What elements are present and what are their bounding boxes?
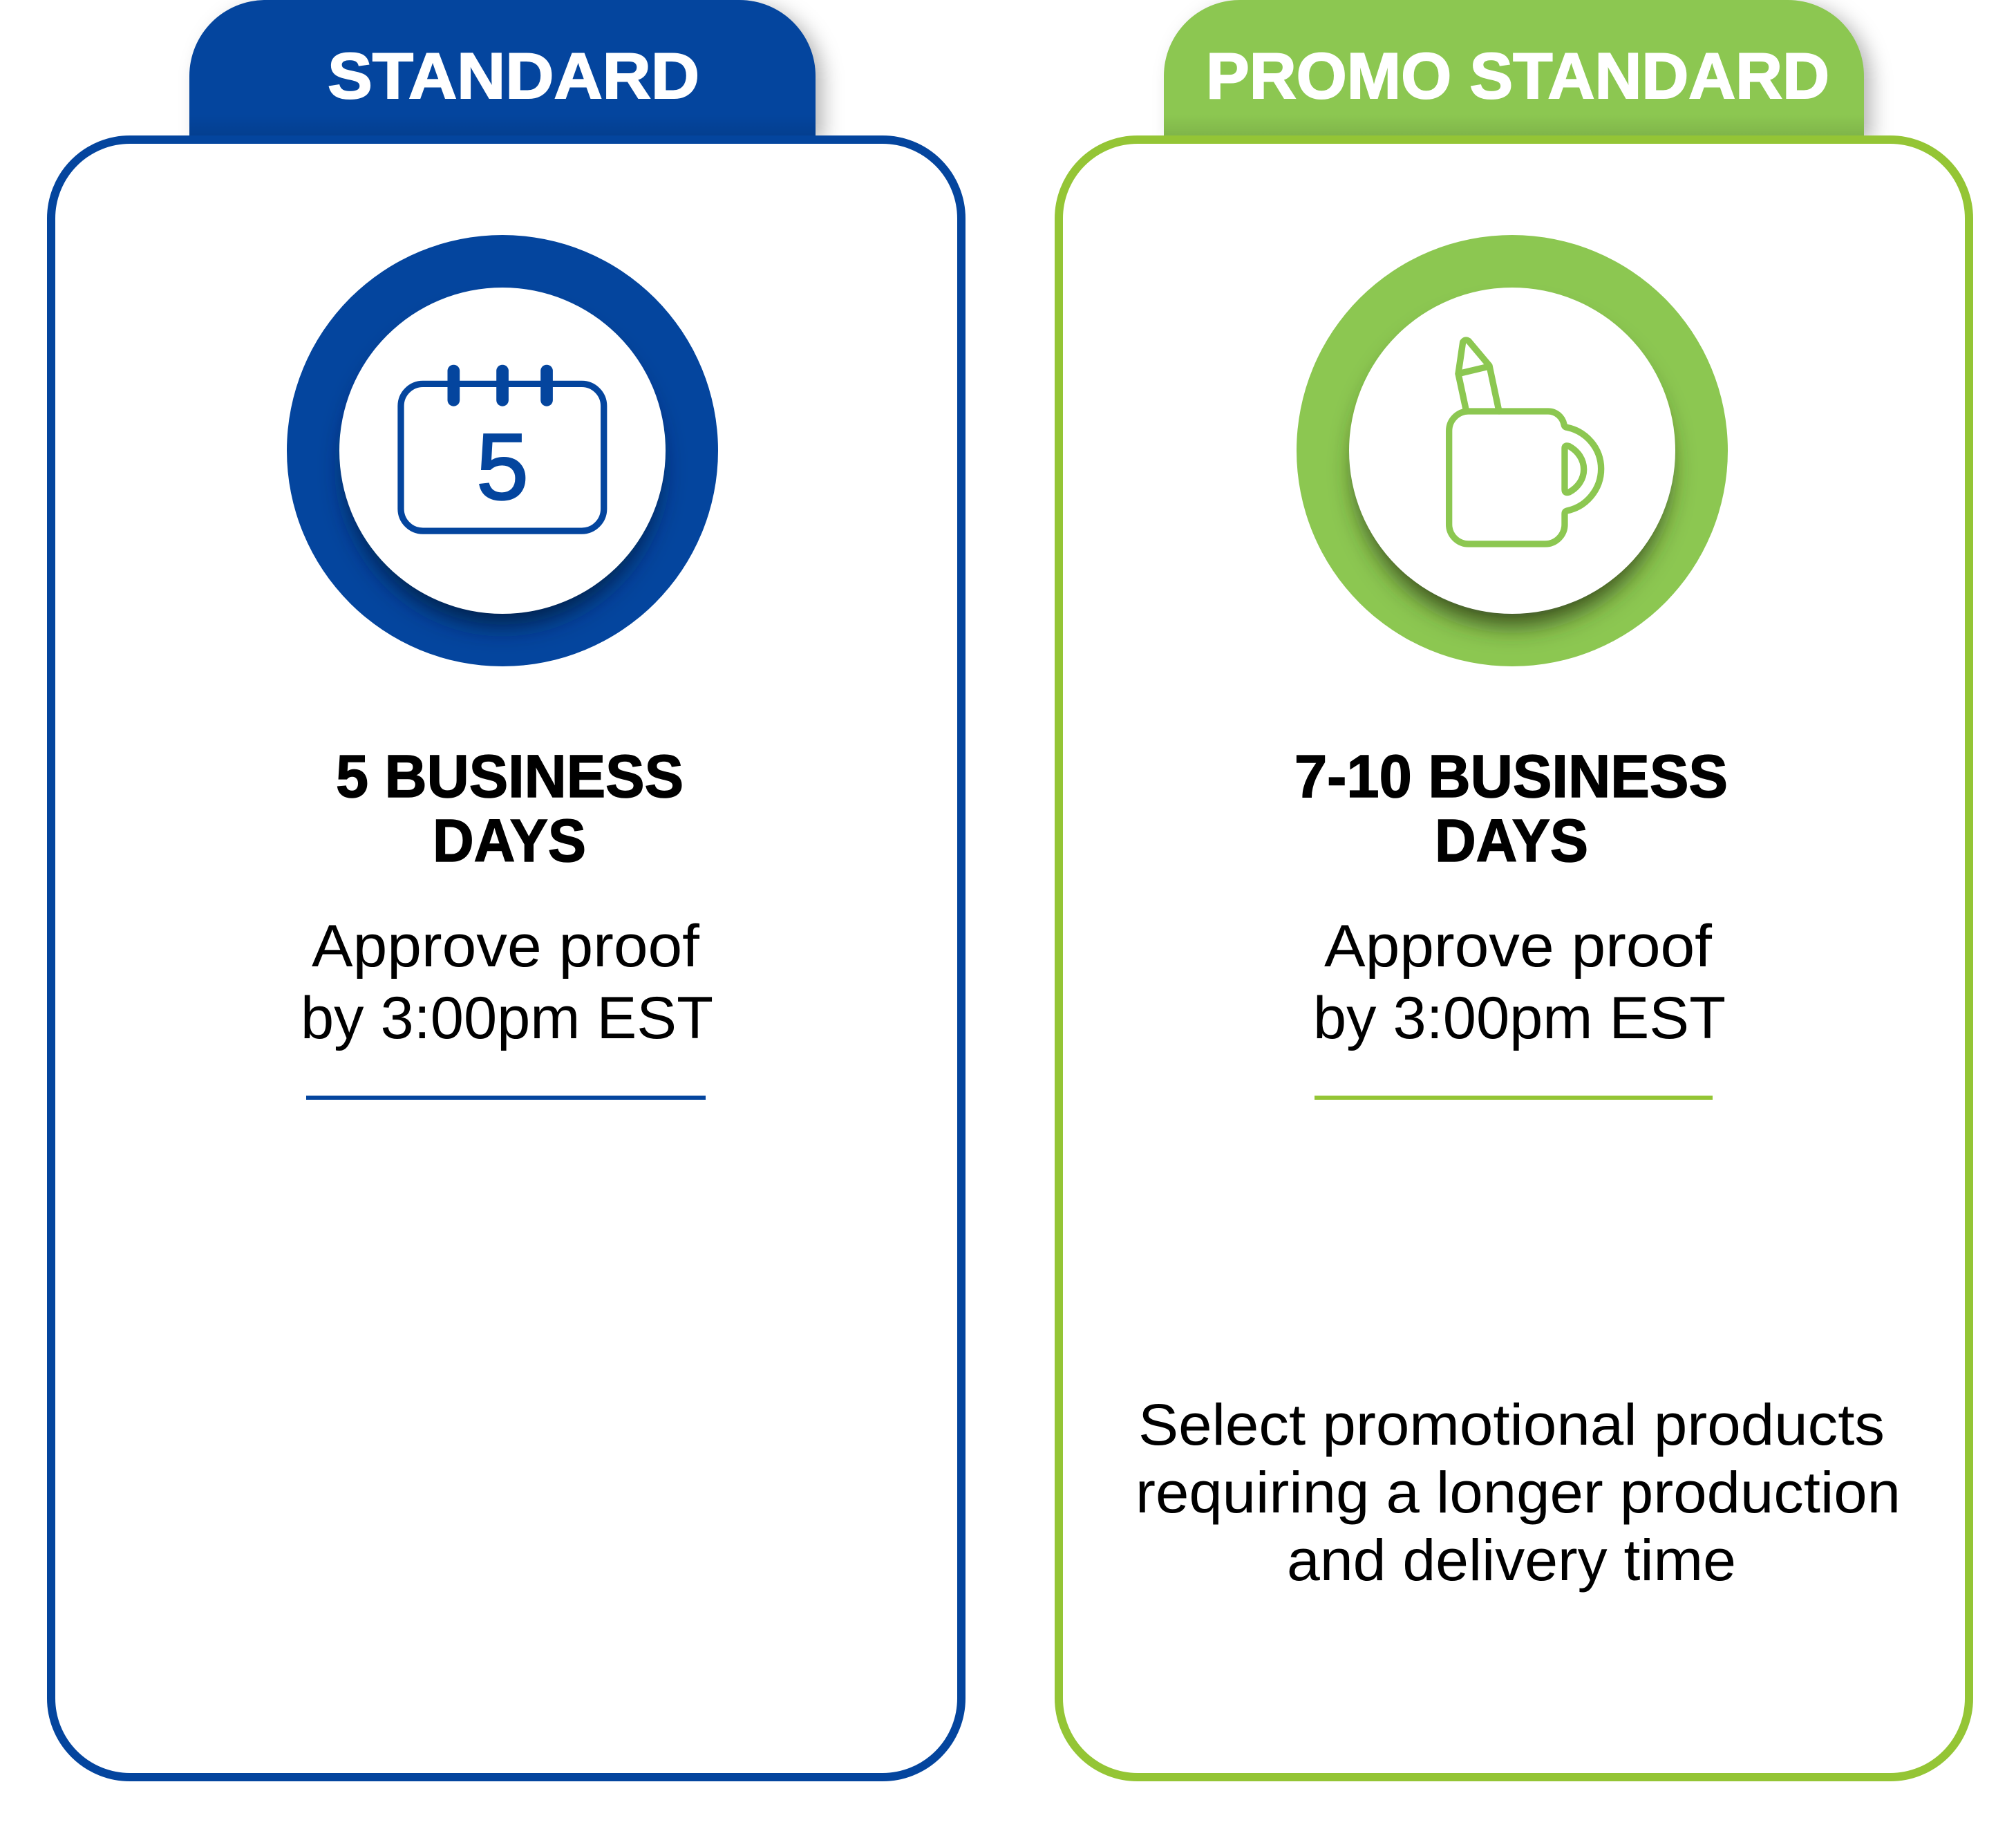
tab: standard bbox=[189, 0, 822, 142]
approval deadline: standard bbox=[301, 913, 713, 1051]
panel: promo standard bbox=[1059, 0, 1969, 1777]
approval deadline: promo standard bbox=[1313, 913, 1726, 1051]
description: promo products: Select promotional products bbox=[1138, 1392, 1885, 1457]
card outline: promo standard bbox=[1059, 140, 1969, 1777]
approval deadline: promo standard: by 3:00pm EST bbox=[1313, 985, 1726, 1051]
heading: standard: STANDARD bbox=[328, 39, 699, 112]
card outline: standard bbox=[51, 140, 961, 1777]
duration: 5 business days bbox=[336, 743, 684, 874]
icon: mug with pencil bbox=[1449, 340, 1601, 544]
icon: calendar: 5 bbox=[476, 414, 529, 519]
description: promo products: and delivery time bbox=[1287, 1528, 1736, 1593]
icon ring: standard bbox=[287, 235, 718, 666]
icon ring: promo standard bbox=[1297, 235, 1728, 666]
duration: 7-10 business days bbox=[1294, 743, 1728, 874]
icon: calendar bbox=[401, 365, 604, 531]
duration: 7-10 business days: DAYS bbox=[1435, 807, 1588, 874]
approval deadline: promo standard: Approve proof bbox=[1324, 913, 1713, 979]
duration: 5 business days: DAYS bbox=[433, 807, 586, 874]
duration: 7-10 business days: 7-10 BUSINESS bbox=[1294, 743, 1728, 810]
description: promo products bbox=[1136, 1392, 1901, 1593]
description: promo products: requiring a longer production bbox=[1136, 1460, 1901, 1525]
approval deadline: standard: by 3:00pm EST bbox=[301, 985, 713, 1051]
heading: promo standard: PROMO STANDARD bbox=[1206, 39, 1829, 112]
approval deadline: standard: Approve proof bbox=[312, 913, 700, 979]
panel: standard bbox=[51, 0, 961, 1777]
tab: promo standard bbox=[1164, 0, 1871, 142]
duration: 5 business days: 5 BUSINESS bbox=[336, 743, 684, 810]
